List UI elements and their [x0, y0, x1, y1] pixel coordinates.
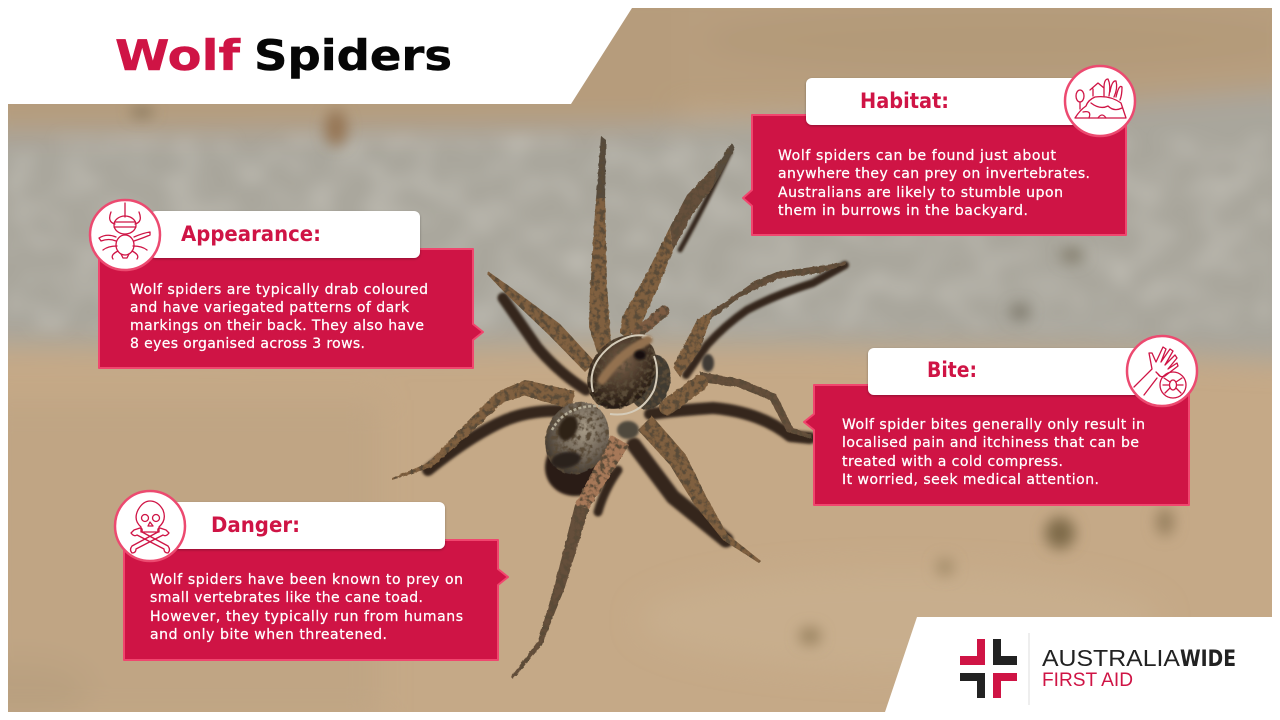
heading bar: [868, 348, 1160, 395]
heading: Habitat:: [860, 89, 949, 113]
illustration: wolf spider: [392, 136, 847, 679]
title: Spiders: [254, 31, 452, 80]
body text: Australians are likely to stumble upon: [778, 185, 1063, 201]
body text: treated with a cold compress.: [842, 454, 1063, 470]
leg: rear centre: [511, 435, 629, 679]
spider cephalothorax: [573, 321, 677, 439]
heading: Bite:: [927, 358, 977, 382]
spider shadows: [428, 152, 845, 540]
body text: [778, 148, 1090, 219]
logo text: WIDE: [1180, 647, 1236, 672]
panel: bite: [804, 336, 1197, 505]
leg: second right: [673, 262, 847, 377]
leg: rear right: [638, 416, 761, 563]
body text: Wolf spiders can be found just about: [778, 148, 1056, 164]
icon: hand with spider bite: [1127, 336, 1197, 406]
panel: danger: [115, 491, 508, 660]
body text: and only bite when threatened.: [150, 627, 387, 643]
body text: [842, 417, 1145, 488]
card body: [804, 385, 1189, 505]
body text: markings on their back. They also have: [130, 318, 424, 334]
leg: third left: [392, 380, 575, 480]
leg: front left: [589, 136, 611, 352]
title: Wolf: [115, 31, 241, 80]
card body: [124, 540, 508, 660]
leg: third right: [667, 372, 812, 439]
body text: [130, 282, 428, 352]
title: [115, 31, 452, 80]
leg: pedipalp: [638, 311, 664, 333]
logo text: [1042, 645, 1236, 691]
body text: localised pain and itchiness that can be: [842, 435, 1139, 451]
heading: Appearance:: [181, 222, 321, 246]
leg: second left: [487, 272, 595, 372]
panel: habitat: [743, 66, 1135, 235]
body text: Wolf spiders are typically drab coloured: [130, 282, 428, 298]
logo mark: cross: [960, 639, 1017, 698]
body text: anywhere they can prey on invertebrates.: [778, 166, 1090, 182]
page border: [632, 0, 1280, 720]
body text: [150, 572, 463, 643]
icon: skull and crossbones: [115, 491, 185, 561]
card body: [743, 115, 1126, 235]
body text: 8 eyes organised across 3 rows.: [130, 336, 365, 352]
card body: [99, 249, 483, 368]
spider knob: [702, 354, 714, 372]
body text: It worried, seek medical attention.: [842, 472, 1099, 488]
body text: However, they typically run from humans: [150, 609, 463, 625]
icon: spider: [90, 200, 160, 270]
body text: them in burrows in the backyard.: [778, 203, 1028, 219]
heading bar: [806, 78, 1096, 125]
logo banner shape: [885, 617, 1280, 720]
panel: appearance: [90, 200, 483, 368]
body text: and have variegated patterns of dark: [130, 300, 410, 316]
title banner shape: [0, 0, 632, 720]
heading: Danger:: [211, 513, 300, 537]
spider abdomen: [534, 392, 620, 484]
icon: burrow habitat: [1065, 66, 1135, 136]
body text: Wolf spider bites generally only result in: [842, 417, 1145, 433]
spider legs: [392, 136, 847, 679]
logo text: FIRST AID: [1042, 670, 1133, 691]
heading bar: [150, 211, 420, 258]
logo: Australia Wide First Aid: [960, 633, 1236, 705]
leg: front right: [620, 143, 735, 338]
logo text: AUSTRALIA: [1042, 645, 1181, 671]
body text: small vertebrates like the cane toad.: [150, 590, 423, 606]
body text: Wolf spiders have been known to prey on: [150, 572, 463, 588]
heading bar: [170, 502, 445, 549]
